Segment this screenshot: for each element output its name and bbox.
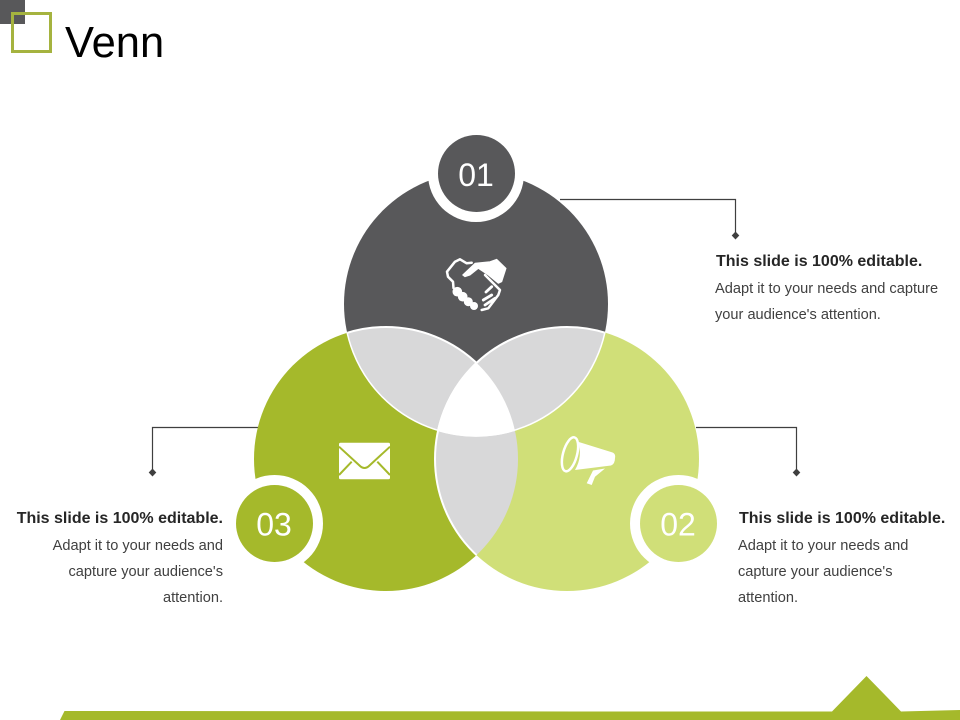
icon: handshake: [447, 259, 506, 310]
text block: left: This slide is 100% editable.: [17, 510, 223, 527]
title decoration: square icon: [0, 0, 50, 52]
badge 03: [226, 475, 323, 572]
overlap: top and left: [347, 326, 476, 430]
overlap: top and right: [438, 326, 605, 430]
icon: megaphone: [559, 436, 615, 485]
badge 03: 03: [256, 506, 292, 542]
icon: envelope: [339, 443, 390, 479]
outline of top circle over right overlap: [442, 332, 606, 437]
text block: top right: Adapt it to your needs and capture: [715, 281, 938, 297]
text block: left: Adapt it to your needs and: [53, 538, 223, 554]
text block: top right: your audience's attention.: [715, 307, 881, 323]
text block: top right: This slide is 100% editable.: [716, 253, 922, 270]
footer bar with triangle: [60, 676, 960, 720]
overlap: centre: [439, 364, 514, 436]
circle: 01 dark grey: [344, 172, 608, 436]
connector: top circle to text: [560, 200, 739, 240]
text block: left: [17, 510, 223, 606]
text block: right: capture your audience's: [738, 564, 892, 580]
text block: left: attention.: [163, 590, 223, 606]
circle: 02 light green: [435, 327, 699, 591]
connector: right circle to text: [696, 428, 800, 476]
badge 02: [630, 475, 727, 572]
badge 02: 02: [660, 506, 696, 542]
text block: right: attention.: [738, 590, 798, 606]
badge 01: [428, 126, 524, 222]
title: Venn: [65, 19, 164, 67]
outline of top circle over overlaps: [346, 332, 514, 437]
connector: left circle to text: [149, 428, 258, 476]
text block: right: [738, 510, 945, 606]
text block: top right: [715, 253, 938, 323]
text block: right: Adapt it to your needs and: [738, 538, 908, 554]
overlap: left and right: [434, 364, 518, 556]
badge 01: 01: [458, 157, 494, 193]
text block: right: This slide is 100% editable.: [739, 510, 945, 527]
circle: 03 dark green: [254, 327, 518, 591]
venn diagram: [254, 172, 699, 591]
text block: left: capture your audience's: [68, 564, 223, 580]
